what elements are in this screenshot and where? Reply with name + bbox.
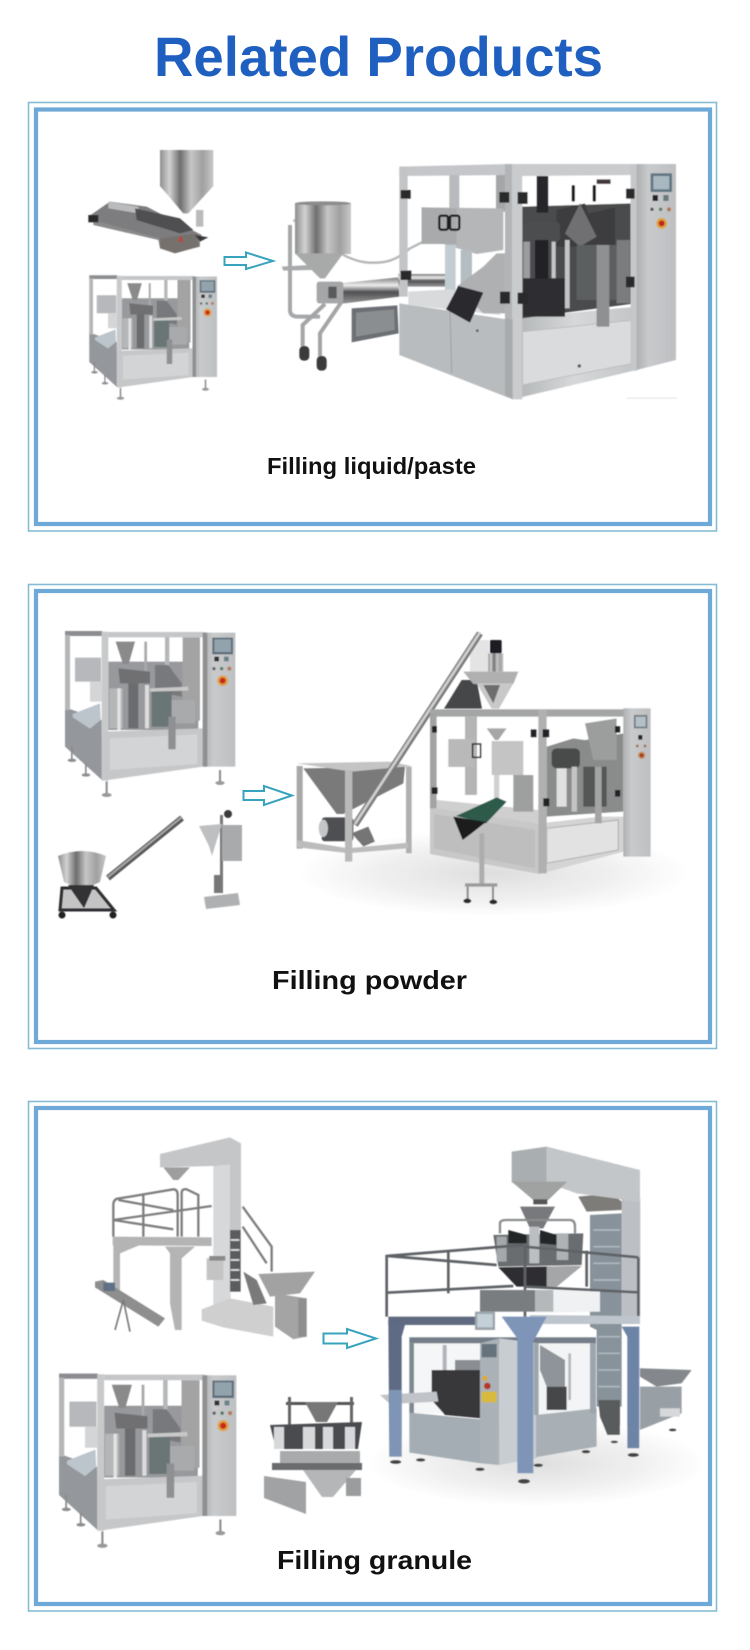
panel frame bbox=[28, 102, 716, 531]
arrow bbox=[224, 252, 273, 269]
label: Filling powder bbox=[272, 965, 467, 995]
image: bucket elevator with platform bbox=[95, 1137, 315, 1339]
image: combined liquid filling machine bbox=[282, 164, 677, 399]
panel frame bbox=[28, 1102, 716, 1611]
arrow bbox=[324, 1329, 376, 1348]
image: combined powder filling machine bbox=[297, 632, 690, 917]
image: paste piston filler bbox=[88, 150, 213, 253]
image: rotary packing machine bbox=[59, 1374, 236, 1548]
panel: filling liquid/paste bbox=[28, 102, 716, 531]
panel: filling granule bbox=[28, 1102, 716, 1611]
image: rotary packing machine bbox=[89, 275, 217, 400]
label: Filling granule bbox=[277, 1545, 472, 1575]
panel: filling powder bbox=[28, 584, 716, 1048]
image: multihead weigher bbox=[264, 1397, 362, 1514]
image: combined granule filling machine bbox=[367, 1147, 707, 1507]
title: Related Products bbox=[154, 25, 603, 88]
image: auger filler bbox=[199, 810, 242, 909]
arrow bbox=[244, 786, 292, 805]
panel frame bbox=[28, 584, 716, 1048]
label: Filling liquid/paste bbox=[267, 453, 476, 479]
image: screw conveyor bbox=[58, 817, 182, 918]
image: rotary packing machine bbox=[65, 631, 235, 797]
